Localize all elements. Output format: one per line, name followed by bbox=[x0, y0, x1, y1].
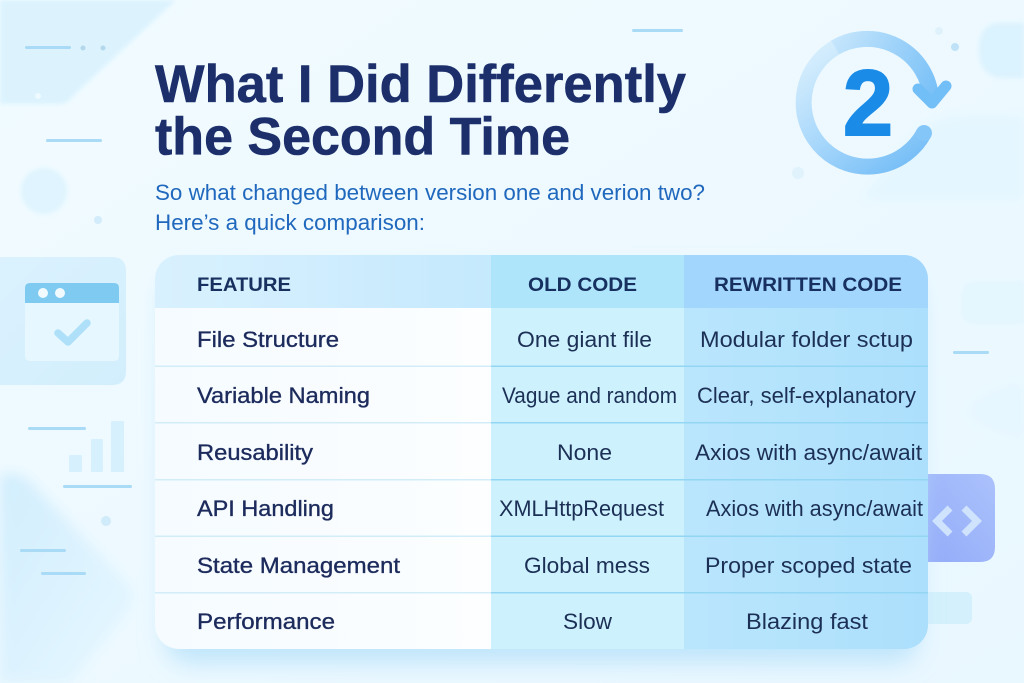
icon: code brackets tile bbox=[920, 474, 995, 562]
table column backgrounds bbox=[155, 255, 928, 649]
table shadow bbox=[165, 275, 918, 663]
decorative shape: top-right blob bbox=[979, 23, 1024, 78]
decorative shape: left circle bbox=[21, 168, 67, 214]
decorative lines bbox=[20, 29, 989, 575]
table header: OLD CODE bbox=[528, 274, 637, 296]
subtitle bbox=[155, 180, 705, 235]
row: Performance: Blazing fast bbox=[746, 609, 868, 634]
icon: circular arrow with number 2 bbox=[804, 39, 946, 167]
title: the Second Time bbox=[155, 108, 570, 166]
decorative dots bbox=[35, 27, 959, 526]
row: API Handling: API Handling bbox=[197, 496, 334, 521]
icon: faint bar chart bbox=[69, 421, 124, 472]
subtitle: So what changed between version one and verion two? bbox=[155, 180, 705, 205]
title bbox=[155, 55, 687, 166]
row: File Structure: One giant file bbox=[517, 327, 652, 352]
row: State Management bbox=[197, 553, 912, 578]
row: Variable Naming: Clear, self-explanatory bbox=[697, 383, 916, 408]
row: API Handling: Axios with async/await bbox=[706, 496, 923, 521]
row: Reusability bbox=[197, 440, 922, 465]
table header: REWRITTEN CODE bbox=[714, 274, 902, 296]
row: State Management: Global mess bbox=[524, 553, 650, 578]
row: State Management: Proper scoped state bbox=[705, 553, 912, 578]
subtitle: Here’s a quick comparison: bbox=[155, 210, 425, 235]
row: Reusability: Axios with async/await bbox=[695, 440, 922, 465]
row: Performance bbox=[197, 609, 868, 634]
decorative shape: right soft blob bbox=[860, 116, 1024, 200]
table header bbox=[197, 274, 902, 296]
row: File Structure: Modular folder sctup bbox=[700, 327, 913, 352]
row: Performance: Slow bbox=[563, 609, 612, 634]
icon: browser window with check bbox=[0, 257, 126, 385]
decorative shape: right pill bbox=[961, 281, 1024, 324]
row: Reusability: Reusability bbox=[197, 440, 314, 465]
row: File Structure bbox=[197, 327, 913, 352]
row: Variable Naming: Variable Naming bbox=[197, 383, 370, 408]
decorative bar behind table bbox=[900, 592, 972, 624]
row: Performance: Performance bbox=[197, 609, 335, 634]
row: API Handling bbox=[197, 496, 923, 521]
number 2: 2 bbox=[843, 51, 893, 155]
title: What I Did Differently bbox=[155, 55, 687, 114]
panel: comparison table bbox=[155, 255, 928, 649]
row: API Handling: XMLHttpRequest bbox=[499, 496, 664, 521]
row: Variable Naming bbox=[197, 383, 916, 408]
table header: FEATURE bbox=[197, 274, 291, 296]
row: File Structure: File Structure bbox=[197, 327, 339, 352]
decorative shape: top-left hexagon bbox=[0, 0, 176, 104]
row: State Management: State Management bbox=[197, 553, 401, 578]
row: Reusability: None bbox=[557, 440, 612, 465]
row: Variable Naming: Vague and random bbox=[502, 383, 677, 408]
decorative shape: bottom-left polygon bbox=[0, 474, 133, 683]
decorative shape: right lower blob bbox=[965, 382, 1024, 440]
